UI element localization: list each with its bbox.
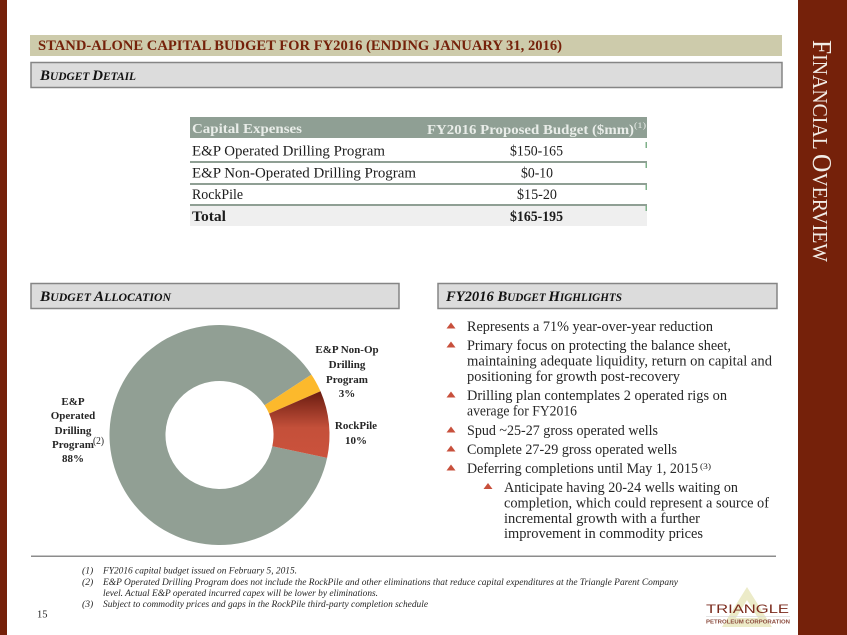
budget table bbox=[190, 117, 647, 226]
label: RockPile: 10% bbox=[345, 435, 367, 447]
label: E&P operated: (2) bbox=[93, 436, 104, 447]
table header bbox=[190, 117, 647, 138]
row: RockPile: $15-20 bbox=[517, 187, 557, 203]
bullet: primary focus: positioning for growth post-recovery bbox=[467, 369, 681, 385]
row: total: Total bbox=[192, 209, 226, 225]
bullet: spud: Spud ~25-27 gross operated wells bbox=[467, 423, 658, 439]
bullet: drilling plan: Drilling plan contemplates 2 operated rigs on bbox=[467, 388, 728, 404]
title band bbox=[30, 35, 782, 56]
row: E&P non-operated: E&P Non-Operated Drilling Program bbox=[192, 166, 417, 182]
heading bar: budget highlights bbox=[438, 284, 777, 308]
page number: 15 bbox=[37, 610, 48, 620]
sub-bullet: anticipate bbox=[484, 480, 769, 542]
row: E&P non-operated: $0-10 bbox=[521, 166, 553, 182]
table header: (1) bbox=[634, 120, 646, 130]
footnotes: Subject to commodity prices and gaps in the RockPile third-party completion schedule bbox=[103, 599, 429, 610]
heading bar: budget detail bbox=[31, 62, 782, 88]
row: E&P operated: E&P Operated Drilling Program bbox=[192, 144, 386, 160]
heading bar: budget allocation bbox=[31, 284, 399, 308]
left brown strip bbox=[0, 0, 7, 635]
bullet: deferring: (3) bbox=[700, 461, 711, 471]
slice: E&P non-op 3% bbox=[265, 375, 320, 414]
bullet: reduction: Represents a 71% year-over-year reduction bbox=[467, 319, 714, 335]
label: E&P operated bbox=[51, 396, 104, 465]
label: E&P operated: Operated bbox=[51, 410, 95, 422]
heading text: budget highlights: FY2016 BUDGET HIGHLIGHTS bbox=[445, 289, 622, 305]
bullet: deferring: Deferring completions until May 1, 2015 bbox=[467, 461, 698, 477]
row: E&P operated bbox=[190, 144, 647, 163]
table header: FY2016 Proposed Budget ($mm) bbox=[427, 123, 634, 138]
logo: Triangle Petroleum Corporation bbox=[706, 587, 790, 627]
slice: E&P operated 88% bbox=[109, 325, 327, 545]
bullet: drilling plan bbox=[446, 388, 728, 420]
label: E&P operated: Drilling bbox=[55, 425, 92, 437]
bullet: primary focus bbox=[446, 338, 773, 385]
footnotes: E&P Operated Drilling Program does not include the RockPile and other eliminations that reduce capital expenditures at the Triangle Parent Company bbox=[102, 577, 679, 588]
label: E&P non-op bbox=[315, 344, 379, 400]
row: E&P non-operated bbox=[190, 166, 647, 185]
label: E&P non-op: E&P Non-Op bbox=[315, 344, 379, 356]
heading text: budget allocation: BUDGET ALLOCATION bbox=[39, 289, 172, 305]
row: RockPile bbox=[190, 187, 647, 206]
label: E&P non-op: Drilling bbox=[329, 359, 366, 371]
footnotes: (1) bbox=[82, 566, 93, 576]
row: total bbox=[190, 206, 647, 226]
donut chart bbox=[109, 325, 330, 545]
label: E&P operated: E&P bbox=[61, 396, 85, 408]
label: E&P operated: Program bbox=[52, 439, 94, 451]
sub-bullet: anticipate: incremental growth with a further bbox=[504, 511, 700, 527]
footnotes bbox=[82, 566, 679, 610]
table header: Capital Expenses bbox=[192, 122, 303, 137]
footnotes: (2) bbox=[82, 577, 93, 588]
slice: RockPile 10% bbox=[269, 391, 330, 458]
sub-bullet: anticipate: Anticipate having 20-24 wells waiting on bbox=[504, 480, 739, 496]
label: RockPile bbox=[335, 420, 377, 447]
sub-bullet: anticipate: improvement in commodity prices bbox=[504, 526, 703, 542]
row: total: $165-195 bbox=[510, 209, 563, 225]
right sidebar bbox=[798, 0, 847, 635]
bullet: complete: Complete 27-29 gross operated wells bbox=[467, 442, 677, 458]
highlights list bbox=[446, 319, 773, 542]
sub-bullet: anticipate: completion, which could represent a source of bbox=[504, 496, 769, 512]
bullet: primary focus: maintaining adequate liquidity, return on capital and bbox=[467, 354, 773, 370]
label: E&P non-op: 3% bbox=[339, 388, 355, 400]
logo: Triangle Petroleum Corporation: PETROLEUM CORPORATION bbox=[706, 620, 790, 626]
label: RockPile: RockPile bbox=[335, 420, 377, 432]
label: E&P non-op: Program bbox=[326, 374, 368, 386]
sidebar title: F INANCIAL O VERVIEW bbox=[807, 40, 837, 262]
logo: Triangle Petroleum Corporation: TRIANGLE bbox=[706, 602, 789, 616]
title: STAND-ALONE CAPITAL BUDGET FOR FY2016 (ENDING JANUARY 31, 2016) bbox=[38, 38, 562, 54]
label: E&P operated: 88% bbox=[62, 453, 84, 465]
bullet: primary focus: Primary focus on protecting the balance sheet, bbox=[467, 338, 731, 354]
row: E&P operated: $150-165 bbox=[510, 144, 563, 160]
footnotes: level. Actual E&P operated incurred capex will be lower by eliminations. bbox=[103, 588, 378, 599]
heading text: budget detail: BUDGET DETAIL bbox=[39, 68, 136, 84]
row: RockPile: RockPile bbox=[192, 187, 243, 203]
footnotes: (3) bbox=[82, 599, 93, 610]
bullet: drilling plan: average for FY2016 bbox=[467, 404, 577, 420]
footnotes: FY2016 capital budget issued on February 5, 2015. bbox=[102, 566, 297, 576]
